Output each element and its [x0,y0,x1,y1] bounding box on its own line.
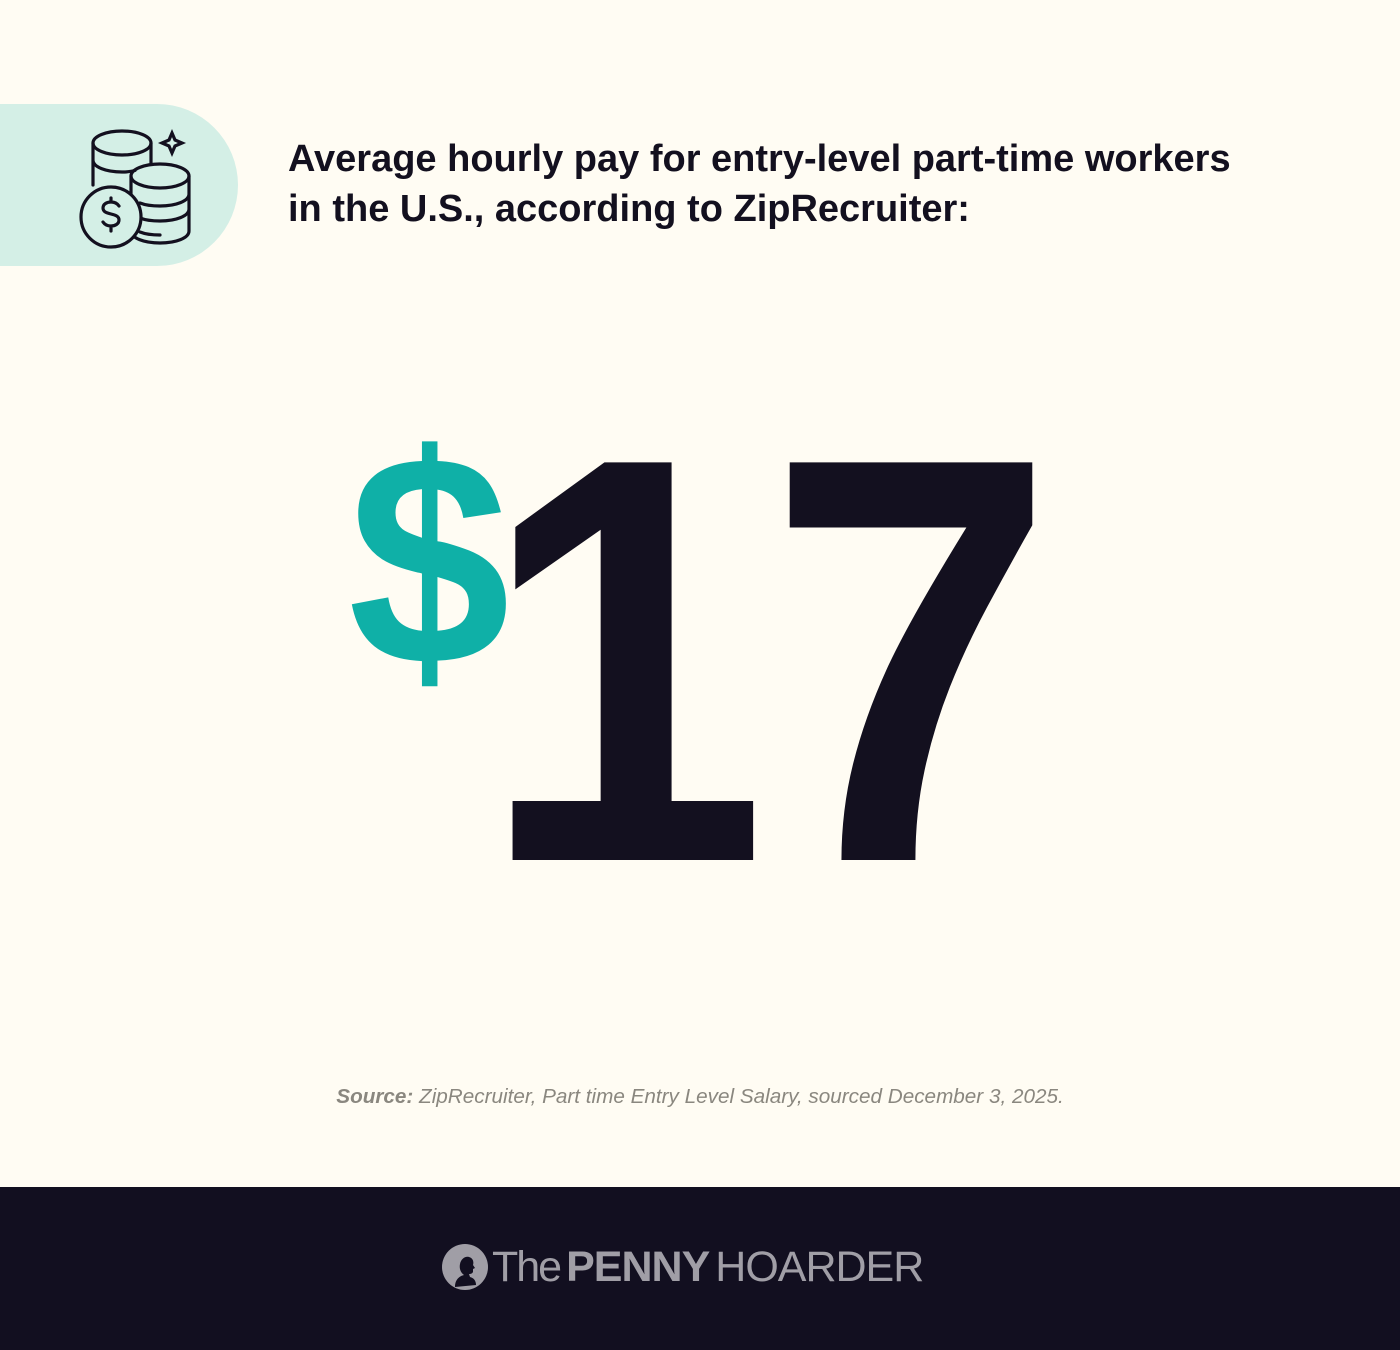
logo: The Penny Hoarder [442,1242,923,1290]
footer band [0,1187,1400,1350]
title [288,138,1231,230]
icon: profile coin [442,1244,488,1290]
logo: The Penny Hoarder: HOARDER [715,1242,923,1290]
logo: The Penny Hoarder: The [492,1242,560,1290]
dollar sign: $ [348,392,510,728]
title: Average hourly pay for entry-level part-time workers [288,138,1231,180]
icon panel: teal pill with coins icon [0,104,238,266]
big number: $17 [348,338,1055,983]
title: in the U.S., according to ZipRecruiter: [288,188,970,230]
icon: coin stacks [79,129,191,249]
logo: The Penny Hoarder: PENNY [566,1242,709,1290]
source note: Source: ZipRecruiter, Part time Entry Level Salary, sourced December 3, 2025. [336,1085,1064,1108]
number 17: 17 [480,338,1055,983]
